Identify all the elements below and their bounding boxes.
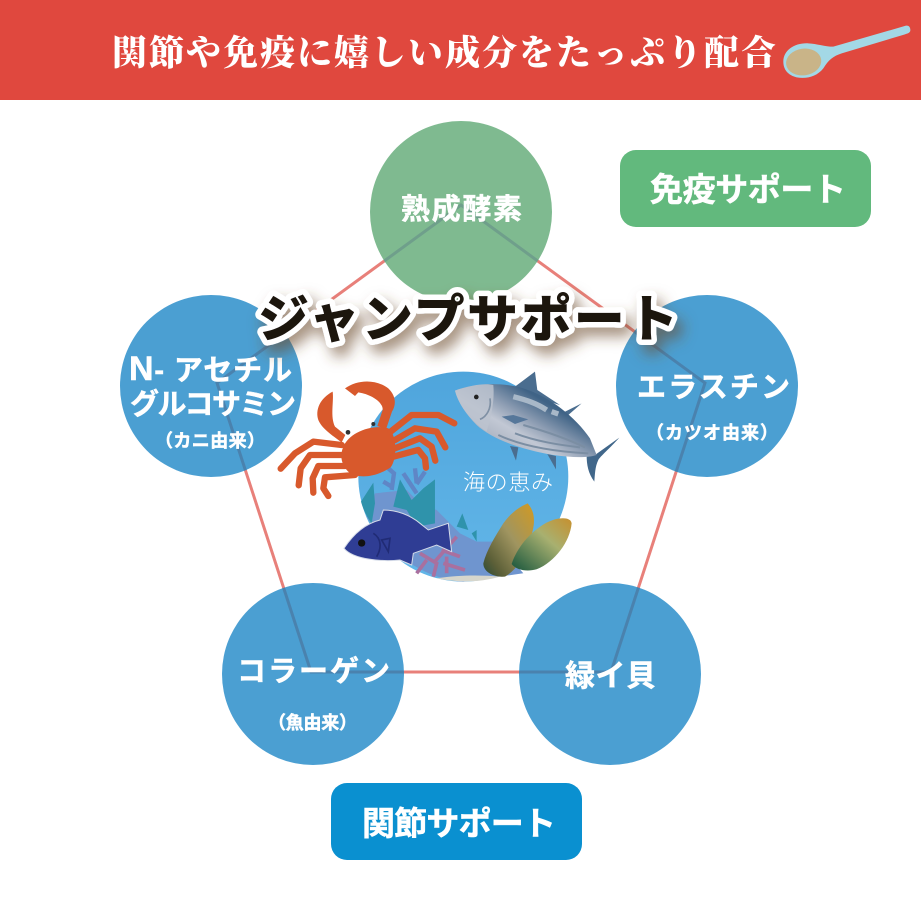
circle: エラスチン [616, 295, 798, 477]
main title: ジャンプサポート: ジャンプサポート [258, 291, 678, 348]
panel: pentagon diagram [120, 121, 798, 765]
connector lines seen through green circle [384, 203, 538, 262]
icon: crab [281, 381, 454, 496]
label: カツオ由来: （カツオ由来） [646, 423, 778, 443]
pentagon connector lines [217, 205, 705, 672]
label: 緑イ貝: 緑イ貝 [565, 660, 656, 693]
label: カニ由来: （カニ由来） [155, 431, 265, 451]
badge: 免疫サポート [620, 150, 871, 227]
badge: 関節サポート: 関節サポート [362, 805, 556, 842]
icon: blue fish [344, 510, 452, 565]
icon: green mussels [483, 503, 572, 577]
label: N-アセチルグルコサミン: N- アセチル [129, 350, 292, 388]
circle: 緑イ貝 [519, 583, 701, 765]
circle: N-アセチルグルコサミン [120, 295, 302, 477]
header title: 関節や免疫に嬉しい成分をたっぷり配合 [112, 34, 776, 73]
circle: コラーゲン [222, 583, 404, 765]
icon: tuna [455, 372, 619, 482]
label: 海の恵み: 海の恵み [463, 470, 553, 495]
circle: 熟成酵素 [370, 121, 552, 303]
label: コラーゲン: コラーゲン [237, 655, 390, 688]
icon: spoon with powder [783, 26, 910, 78]
label: N-アセチルグルコサミン: グルコサミン [130, 388, 296, 421]
label: 魚由来: （魚由来） [268, 712, 357, 733]
header banner [0, 0, 921, 100]
label: 熟成酵素: 熟成酵素 [401, 193, 522, 226]
illustration: sea creatures [281, 372, 619, 582]
sea circle [358, 372, 568, 582]
badge: 免疫サポート: 免疫サポート [650, 171, 846, 208]
label: エラスチン: エラスチン [637, 372, 790, 404]
label: N-アセチルグルコサミン [129, 350, 296, 421]
badge: 関節サポート [331, 783, 582, 860]
connector lines seen through blue circles [215, 330, 707, 674]
